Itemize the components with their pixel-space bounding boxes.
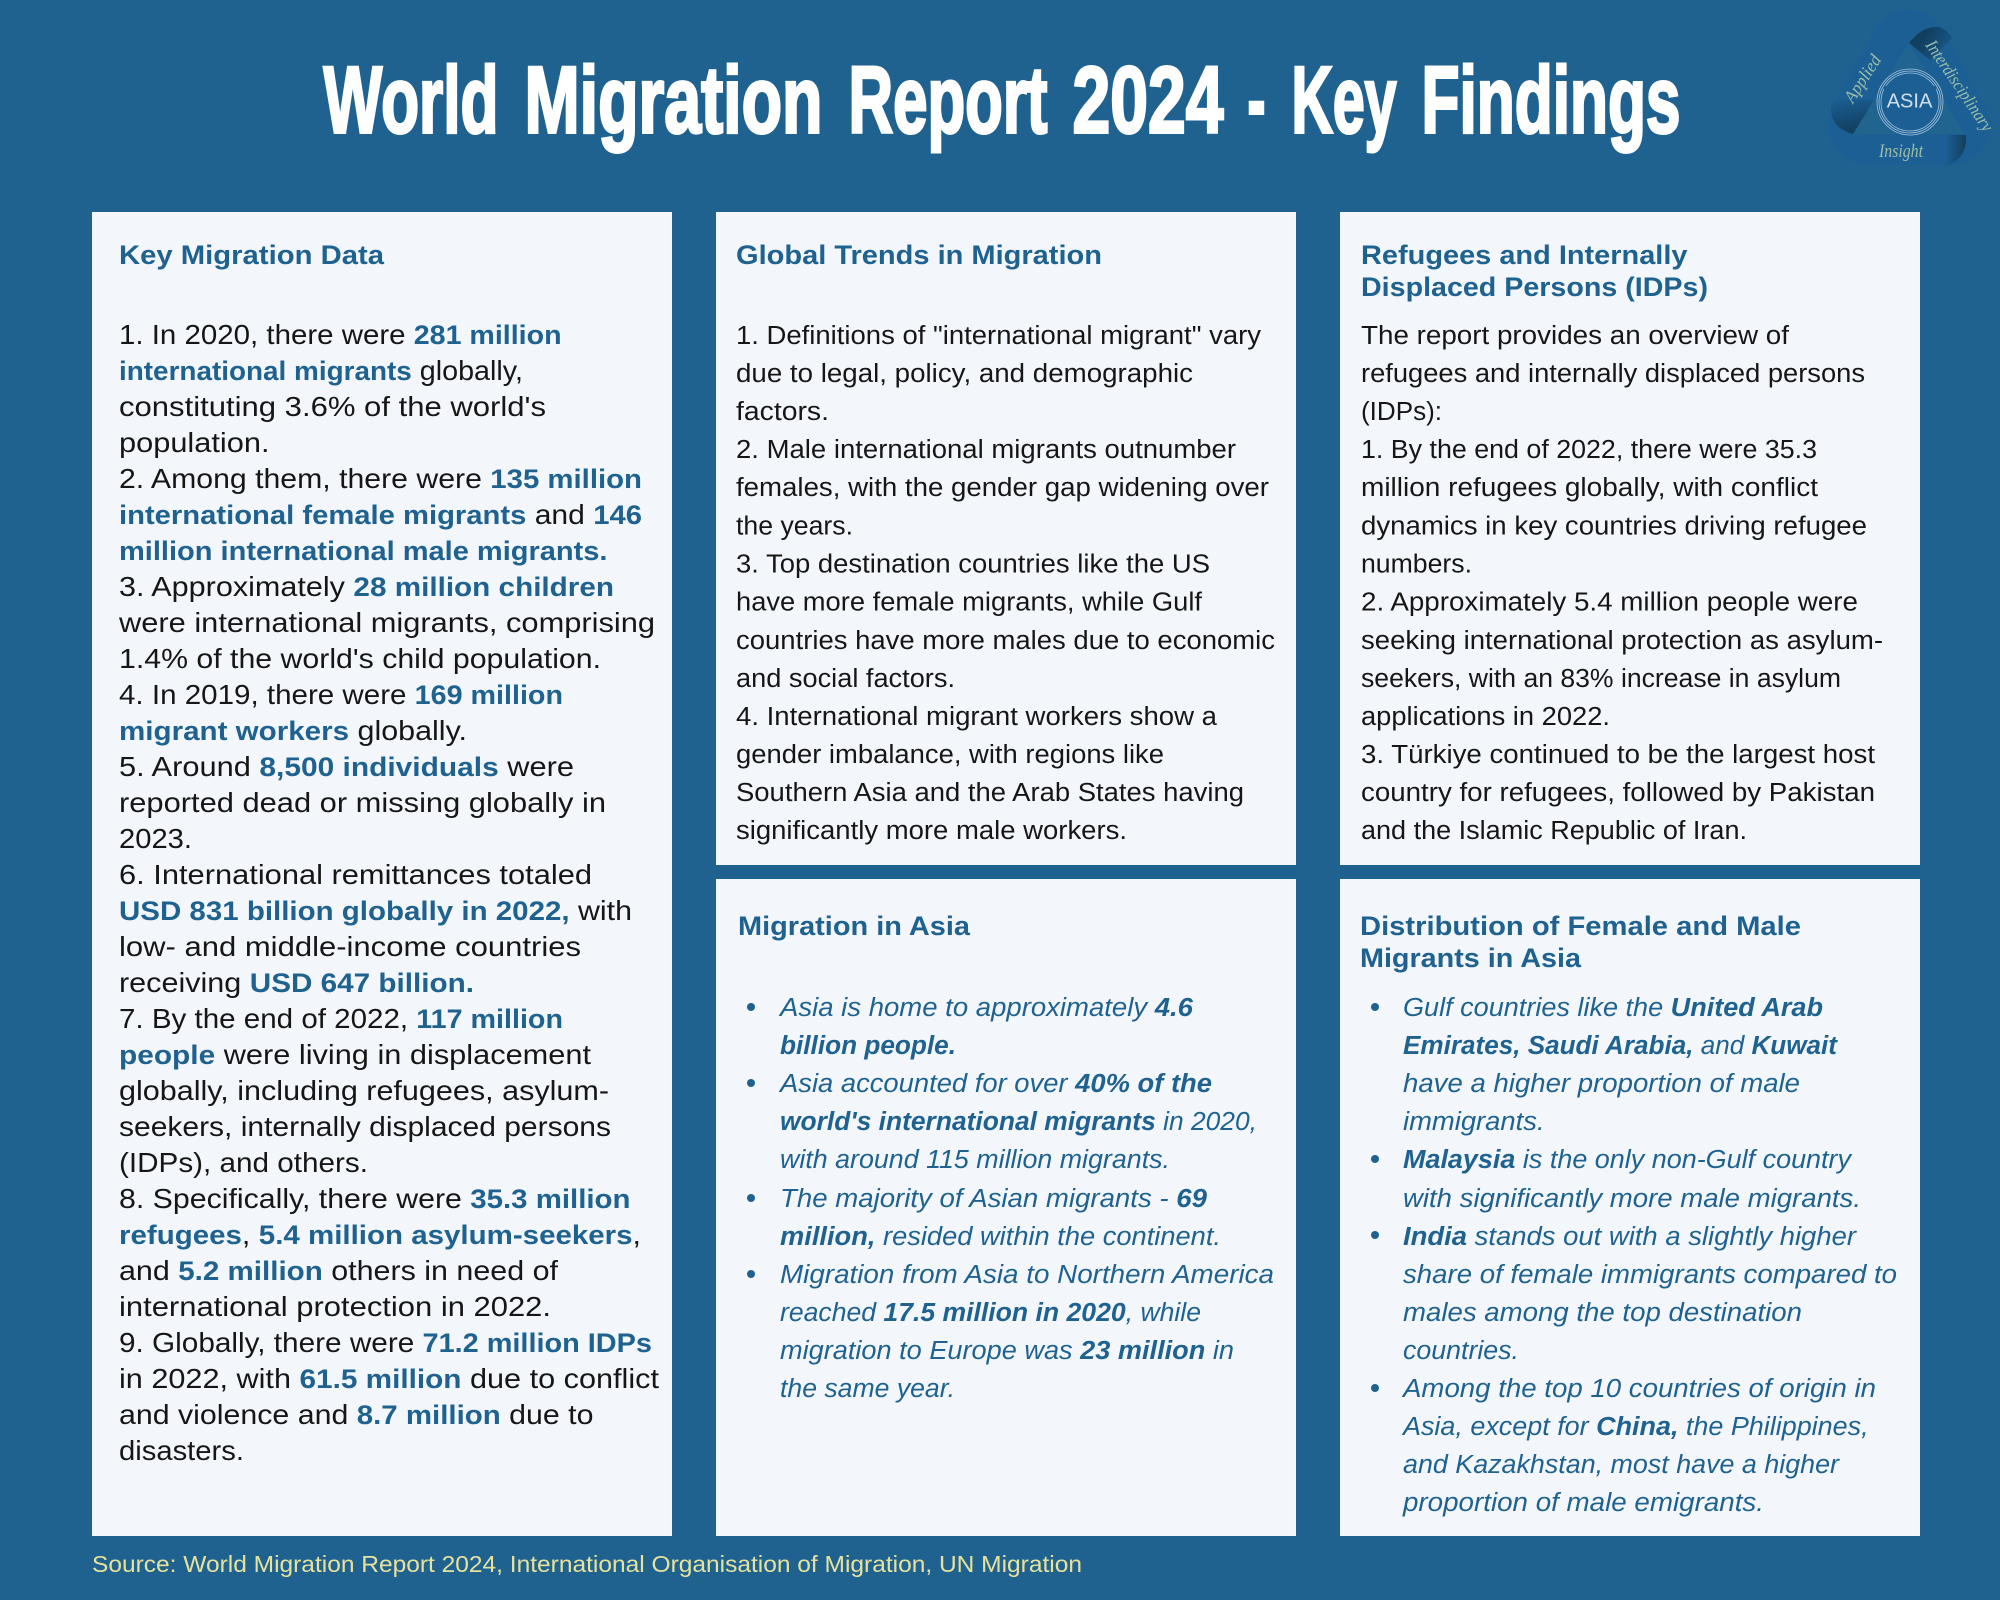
heading: migration in Asia: Migration in Asia: [738, 911, 971, 941]
text block: distribution bullets: Emirates, Saudi Arabia, and Kuwait: [1403, 1032, 1839, 1060]
text block: key migration data list: million international male migrants.: [119, 535, 608, 566]
bullet markers: [1371, 1003, 1379, 1392]
text block: migration in Asia bullets: the same year.: [780, 1375, 955, 1403]
text block: key migration data list: 1. In 2020, there were 281 million: [119, 319, 562, 350]
text block: key migration data list: international female migrants and 146: [119, 499, 642, 530]
heading: distribution of female and male migrants: [1360, 911, 1801, 973]
text block: refugees and IDPs list: numbers.: [1361, 550, 1472, 578]
text block: distribution bullets: Gulf countries like the United Arab: [1403, 994, 1823, 1022]
text block: refugees and IDPs list: and the Islamic Republic of Iran.: [1361, 817, 1747, 845]
text block: global trends list: females, with the gender gap widening over: [736, 474, 1270, 502]
text block: key migration data list: USD 831 billion globally in 2022, with: [119, 895, 632, 926]
logo circle: ASIA: [1887, 90, 1933, 112]
text block: key migration data list: international protection in 2022.: [119, 1291, 551, 1322]
text block: refugees and IDPs list: country for refugees, followed by Pakistan: [1361, 779, 1875, 807]
title: -: [1248, 48, 1266, 154]
text block: refugees and IDPs list: applications in 2022.: [1361, 703, 1610, 731]
text block: key migration data list: migrant workers globally.: [119, 715, 467, 746]
text block: key migration data list: constituting 3.6% of the world's: [119, 391, 546, 422]
text block: global trends list: 4. International migrant workers show a: [736, 703, 1218, 731]
text block: key migration data list: 8. Specifically, there were 35.3 million: [119, 1183, 630, 1214]
title: Migration: [524, 48, 822, 154]
text block: key migration data list: 1.4% of the world's child population.: [119, 643, 601, 674]
text block: migration in Asia bullets: Asia accounted for over 40% of the: [778, 1070, 1212, 1098]
text block: key migration data list: 3. Approximately 28 million children: [119, 571, 614, 602]
text block: key migration data list: and violence and 8.7 million due to: [119, 1399, 594, 1430]
text block: refugees and IDPs list: (IDPs):: [1361, 398, 1442, 426]
text block: key migration data list: [118, 319, 659, 1466]
bullet markers: [747, 1003, 755, 1278]
title: [324, 48, 1680, 154]
text block: migration in Asia bullets: migration to Europe was 23 million in: [780, 1337, 1234, 1365]
text block: global trends list: the years.: [736, 512, 853, 540]
text block: refugees and IDPs list: 2. Approximately 5.4 million people were: [1361, 588, 1858, 616]
text block: migration in Asia bullets: Migration from Asia to Northern America: [780, 1261, 1274, 1289]
text block: distribution bullets: share of female immigrants compared to: [1403, 1261, 1897, 1289]
text block: global trends list: significantly more male workers.: [736, 817, 1127, 845]
title: Key: [1292, 48, 1397, 154]
text block: distribution bullets: males among the top destination: [1403, 1299, 1802, 1327]
text block: distribution bullets: have a higher proportion of male: [1403, 1070, 1800, 1098]
text block: key migration data list: 9. Globally, there were 71.2 million IDPs: [119, 1327, 652, 1358]
text block: key migration data list: seekers, internally displaced persons: [119, 1111, 611, 1142]
text block: key migration data list: reported dead or missing globally in: [119, 787, 606, 818]
text block: key migration data list: 5. Around 8,500 individuals were: [119, 751, 574, 782]
text block: key migration data list: were international migrants, comprising: [118, 607, 655, 638]
icon: ASIA logo: [1831, 27, 1998, 166]
text block: key migration data list: receiving USD 647 billion.: [119, 967, 474, 998]
text block: distribution bullets: proportion of male emigrants.: [1402, 1489, 1764, 1517]
text block: migration in Asia bullets: world's international migrants in 2020,: [780, 1108, 1257, 1136]
logo label: Applied: Applied: [1839, 50, 1886, 107]
text block: refugees and IDPs list: refugees and internally displaced persons: [1361, 360, 1865, 388]
text block: key migration data list: people were living in displacement: [119, 1039, 591, 1070]
text block: key migration data list: 2023.: [119, 823, 192, 854]
text block: global trends list: due to legal, policy, and demographic: [736, 360, 1193, 388]
text block: migration in Asia bullets: [778, 994, 1274, 1403]
title: 2024: [1072, 48, 1224, 154]
heading: distribution of female and male migrants: Distribution of Female and Male: [1360, 911, 1801, 941]
text block: global trends list: Southern Asia and the Arab States having: [736, 779, 1244, 807]
text block: key migration data list: in 2022, with 61.5 million due to conflict: [119, 1363, 659, 1394]
source note: Source: World Migration Report 2024, International Organisation of Migration, UN Migration: [92, 1551, 1082, 1577]
text block: refugees and IDPs list: 3. Türkiye continued to be the largest host: [1361, 741, 1875, 769]
heading: refugees and IDPs: Refugees and Internally: [1361, 240, 1688, 270]
text block: global trends list: factors.: [736, 398, 829, 426]
text block: refugees and IDPs list: 1. By the end of 2022, there were 35.3: [1361, 436, 1817, 464]
text block: refugees and IDPs list: dynamics in key countries driving refugee: [1361, 512, 1867, 540]
heading: distribution of female and male migrants: Migrants in Asia: [1360, 943, 1582, 973]
text block: migration in Asia bullets: million, resided within the continent.: [780, 1223, 1221, 1251]
panel: global trends in migration: [716, 212, 1296, 865]
text block: key migration data list: 6. International remittances totaled: [119, 859, 592, 890]
title: Report: [848, 48, 1048, 154]
text block: key migration data list: globally, including refugees, asylum-: [119, 1075, 609, 1106]
panel: distribution of female and male migrants in Asia: [1340, 879, 1920, 1536]
text block: refugees and IDPs list: seekers, with an 83% increase in asylum: [1361, 665, 1841, 693]
heading: refugees and IDPs: Displaced Persons (IDPs): [1361, 272, 1708, 302]
text block: distribution bullets: with significantly more male migrants.: [1403, 1185, 1861, 1213]
text block: refugees and IDPs list: seeking international protection as asylum-: [1361, 627, 1883, 655]
text block: key migration data list: low- and middle-income countries: [119, 931, 581, 962]
text block: distribution bullets: Malaysia is the only non-Gulf country: [1403, 1146, 1853, 1174]
text block: global trends list: countries have more males due to economic: [736, 627, 1275, 655]
text block: migration in Asia bullets: Asia is home to approximately 4.6: [778, 994, 1194, 1022]
heading: refugees and IDPs: [1361, 240, 1708, 302]
text block: key migration data list: refugees , 5.4 million asylum-seekers ,: [119, 1219, 641, 1250]
text block: migration in Asia bullets: The majority of Asian migrants - 69: [780, 1185, 1208, 1213]
text block: distribution bullets: Among the top 10 countries of origin in: [1401, 1375, 1876, 1403]
panel: refugees and internally displaced persons: [1340, 212, 1920, 865]
text block: distribution bullets: countries.: [1403, 1337, 1519, 1365]
text block: migration in Asia bullets: billion people.: [780, 1032, 956, 1060]
text block: global trends list: 1. Definitions of "international migrant" vary: [736, 322, 1261, 350]
text block: distribution bullets: immigrants.: [1403, 1108, 1545, 1136]
text block: global trends list: gender imbalance, with regions like: [736, 741, 1164, 769]
text block: key migration data list: population.: [119, 427, 270, 458]
text block: key migration data list: international migrants globally,: [119, 355, 523, 386]
text block: global trends list: [736, 322, 1275, 845]
text block: distribution bullets: [1401, 994, 1897, 1517]
text block: key migration data list: and 5.2 million others in need of: [119, 1255, 558, 1286]
text block: refugees and IDPs list: million refugees globally, with conflict: [1361, 474, 1818, 502]
title: World: [324, 48, 498, 154]
text block: global trends list: 2. Male international migrants outnumber: [736, 436, 1237, 464]
title: Findings: [1422, 48, 1680, 154]
panel: key migration data: [92, 212, 672, 1536]
text block: key migration data list: 4. In 2019, there were 169 million: [119, 679, 563, 710]
text block: distribution bullets: and Kazakhstan, most have a higher: [1403, 1451, 1841, 1479]
text block: refugees and IDPs list: [1361, 322, 1883, 845]
logo label: Insight: Insight: [1878, 141, 1924, 162]
text block: distribution bullets: India stands out with a slightly higher: [1403, 1223, 1858, 1251]
text block: key migration data list: 7. By the end of 2022, 117 million: [119, 1003, 563, 1034]
text block: key migration data list: disasters.: [119, 1435, 244, 1466]
text block: global trends list: 3. Top destination countries like the US: [736, 550, 1210, 578]
panel: migration in Asia: [716, 879, 1296, 1536]
heading: key migration data: Key Migration Data: [119, 240, 385, 270]
text block: distribution bullets: Asia, except for China, the Philippines,: [1401, 1413, 1869, 1441]
text block: global trends list: have more female migrants, while Gulf: [736, 588, 1203, 616]
text block: migration in Asia bullets: with around 115 million migrants.: [780, 1146, 1170, 1174]
heading: global trends in migration: Global Trends in Migration: [736, 240, 1102, 270]
text block: key migration data list: 2. Among them, there were 135 million: [119, 463, 642, 494]
text block: global trends list: and social factors.: [736, 665, 955, 693]
text block: migration in Asia bullets: reached 17.5 million in 2020 , while: [780, 1299, 1201, 1327]
logo circle: [1876, 68, 1944, 136]
text block: key migration data list: (IDPs), and others.: [119, 1147, 368, 1178]
text block: refugees and IDPs list: The report provides an overview of: [1361, 322, 1790, 350]
